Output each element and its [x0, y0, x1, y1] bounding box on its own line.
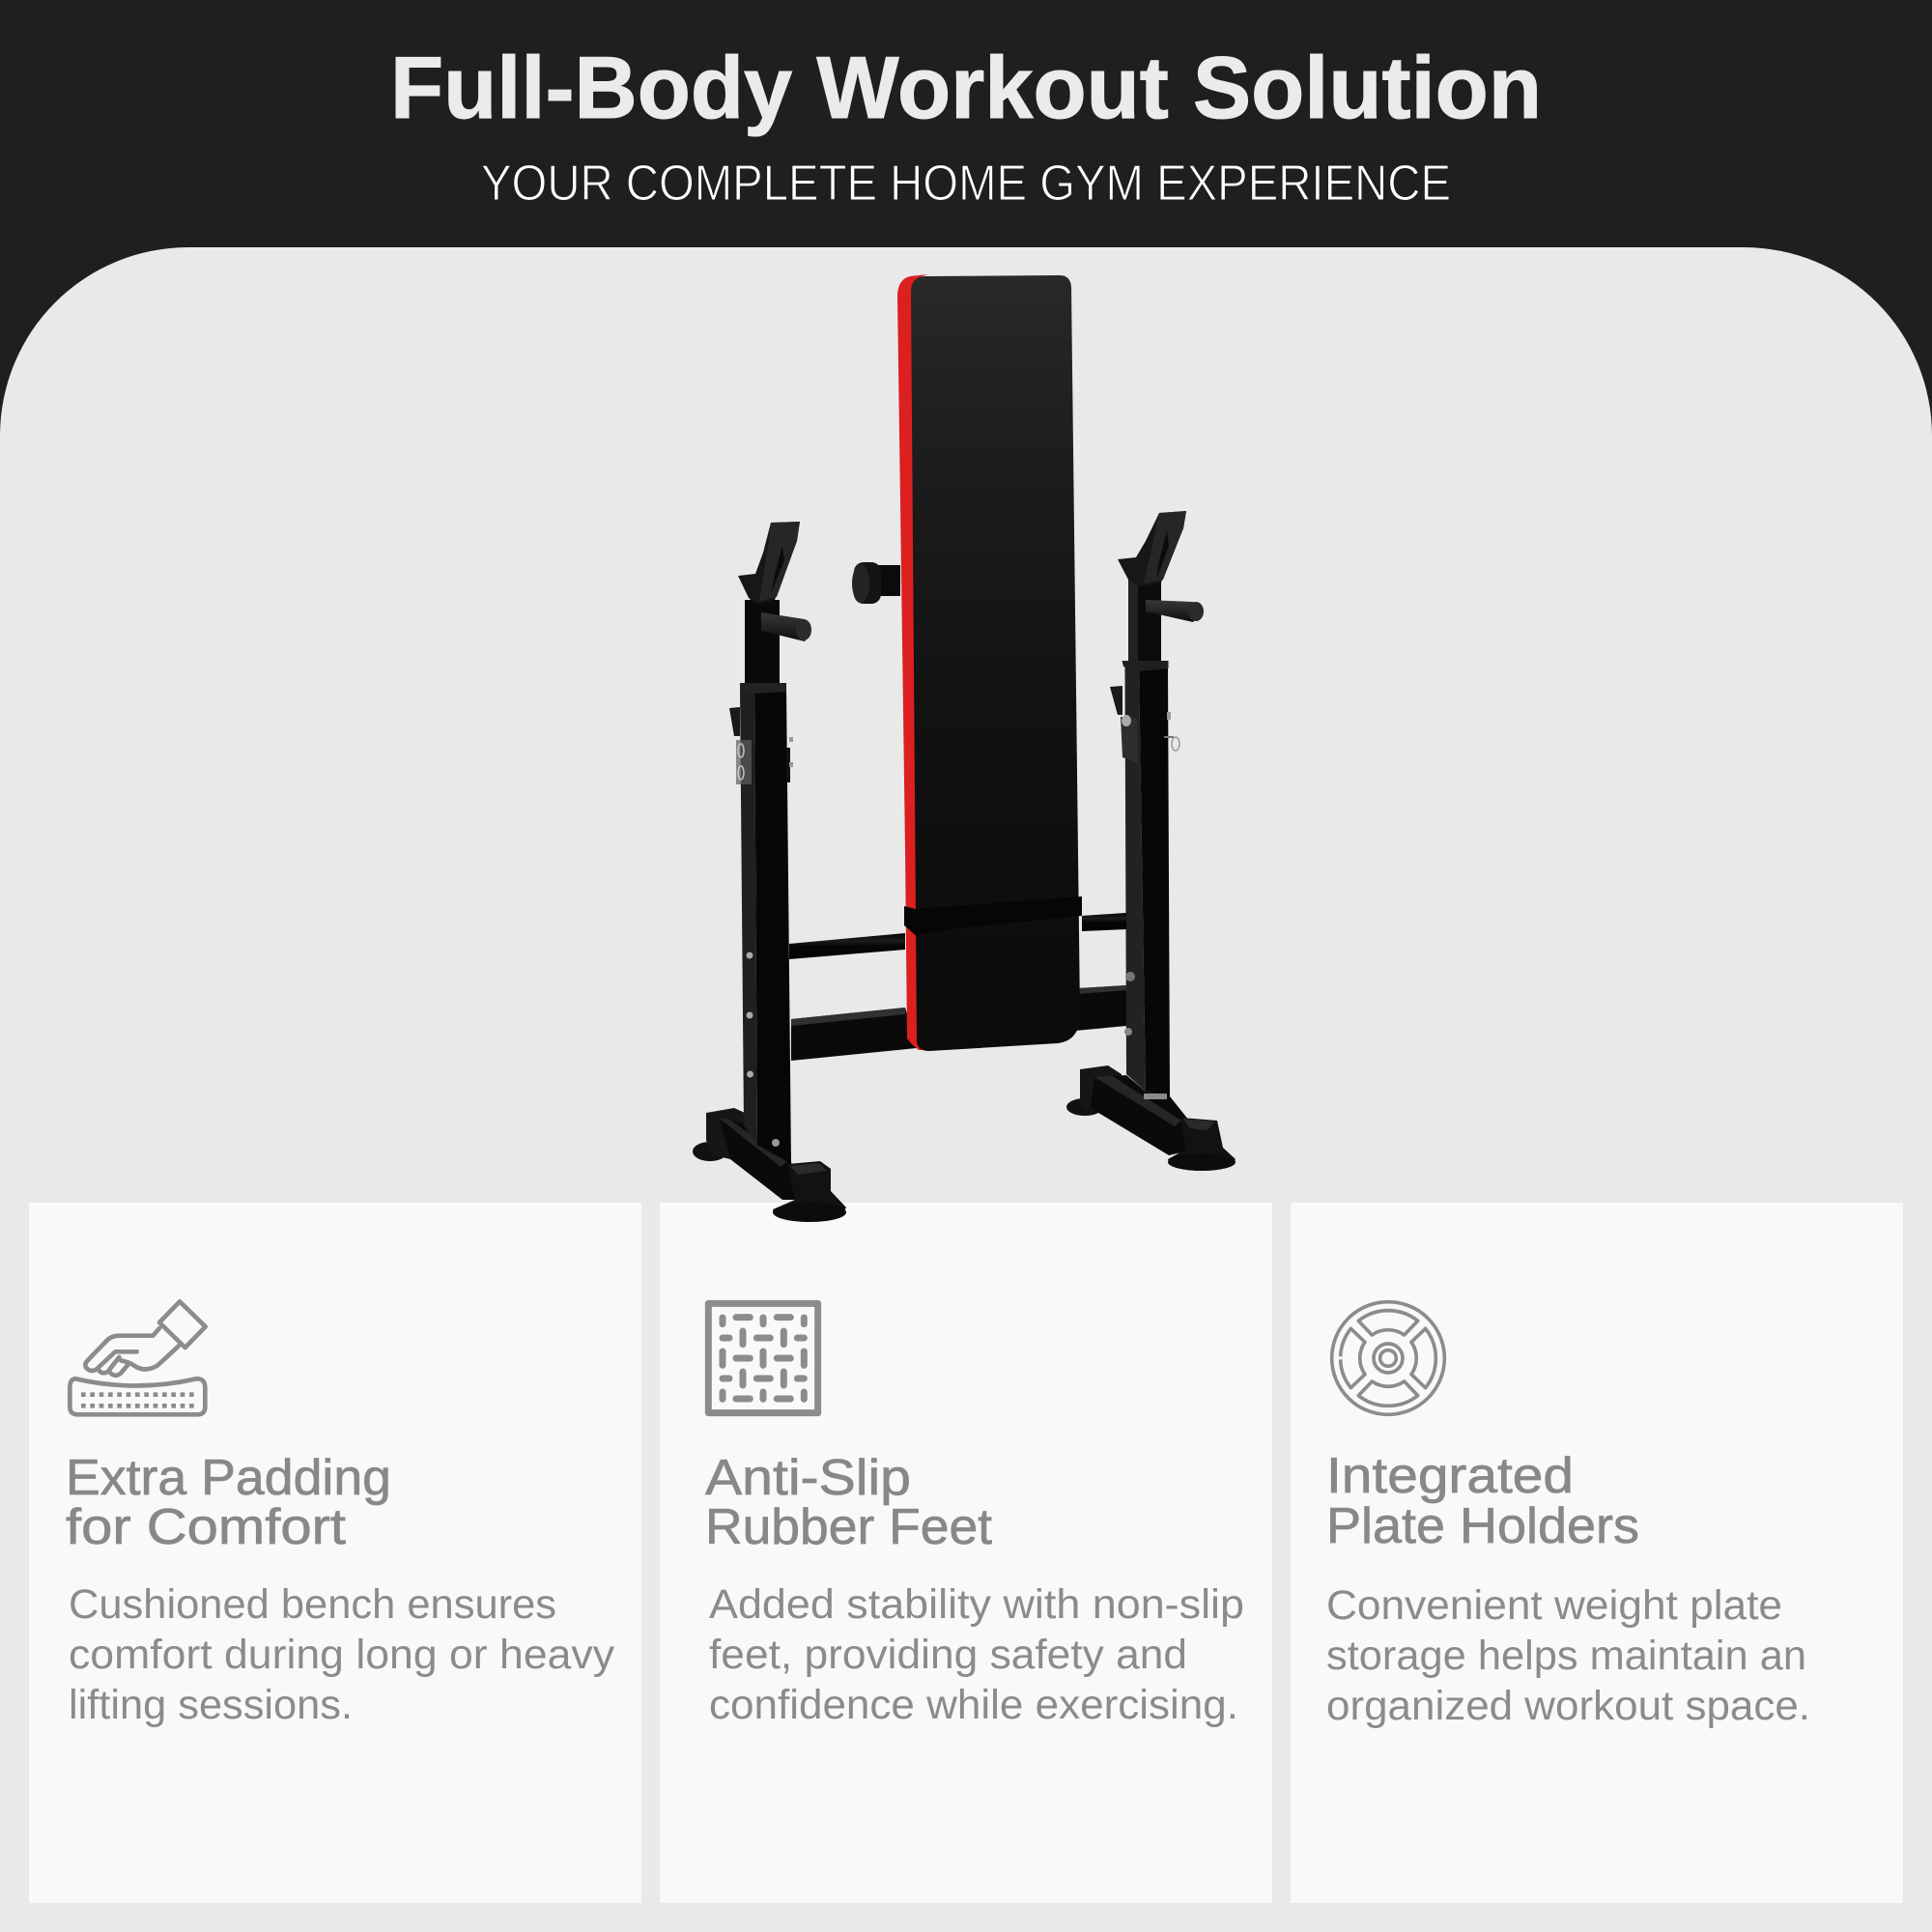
product: weight bench [693, 274, 1236, 1222]
description [69, 1581, 615, 1728]
red bench edge [897, 274, 929, 1050]
heading [1326, 1448, 1639, 1554]
heading: Integrated [1326, 1448, 1574, 1504]
card content: extra padding [66, 1301, 615, 1728]
title: Full-Body Workout Solution [390, 40, 1542, 137]
icon: weight plate [1332, 1302, 1444, 1414]
description: Cushioned bench ensures [69, 1581, 556, 1628]
description: organized workout space. [1326, 1683, 1810, 1729]
description: comfort during long or heavy [69, 1632, 615, 1678]
heading: Anti-Slip [705, 1450, 911, 1506]
card content: anti-slip [705, 1303, 1244, 1728]
card: extra padding background [29, 1203, 641, 1903]
crossbars [783, 913, 1135, 1082]
card content: plate holders [1326, 1302, 1810, 1729]
icon: hand pressing cushion [70, 1301, 206, 1414]
card: plate holders background [1291, 1203, 1903, 1903]
padded bench top [911, 275, 1080, 1051]
description: lifting sessions. [69, 1682, 353, 1728]
right upright [1110, 511, 1204, 1099]
description: Convenient weight plate [1326, 1582, 1782, 1629]
description: storage helps maintain an [1326, 1633, 1806, 1679]
heading: Extra Padding [66, 1450, 391, 1506]
icon: anti-slip texture [708, 1303, 818, 1413]
description: confidence while exercising. [709, 1682, 1238, 1728]
description: feet, providing safety and [709, 1632, 1187, 1678]
left upright [729, 522, 811, 1164]
bench strap [904, 896, 1082, 937]
card: anti-slip background [660, 1203, 1272, 1903]
heading: for Comfort [66, 1499, 347, 1555]
heading [705, 1450, 993, 1555]
description: Added stability with non-slip [709, 1581, 1244, 1628]
left base foot [693, 1108, 846, 1222]
subtitle: YOUR COMPLETE HOME GYM EXPERIENCE [481, 156, 1451, 212]
heading: Plate Holders [1326, 1498, 1639, 1554]
rear knob [852, 562, 900, 604]
heading [66, 1450, 391, 1555]
description [709, 1581, 1244, 1728]
heading: Rubber Feet [705, 1499, 993, 1555]
right base foot [1066, 1065, 1236, 1171]
description [1326, 1582, 1810, 1729]
